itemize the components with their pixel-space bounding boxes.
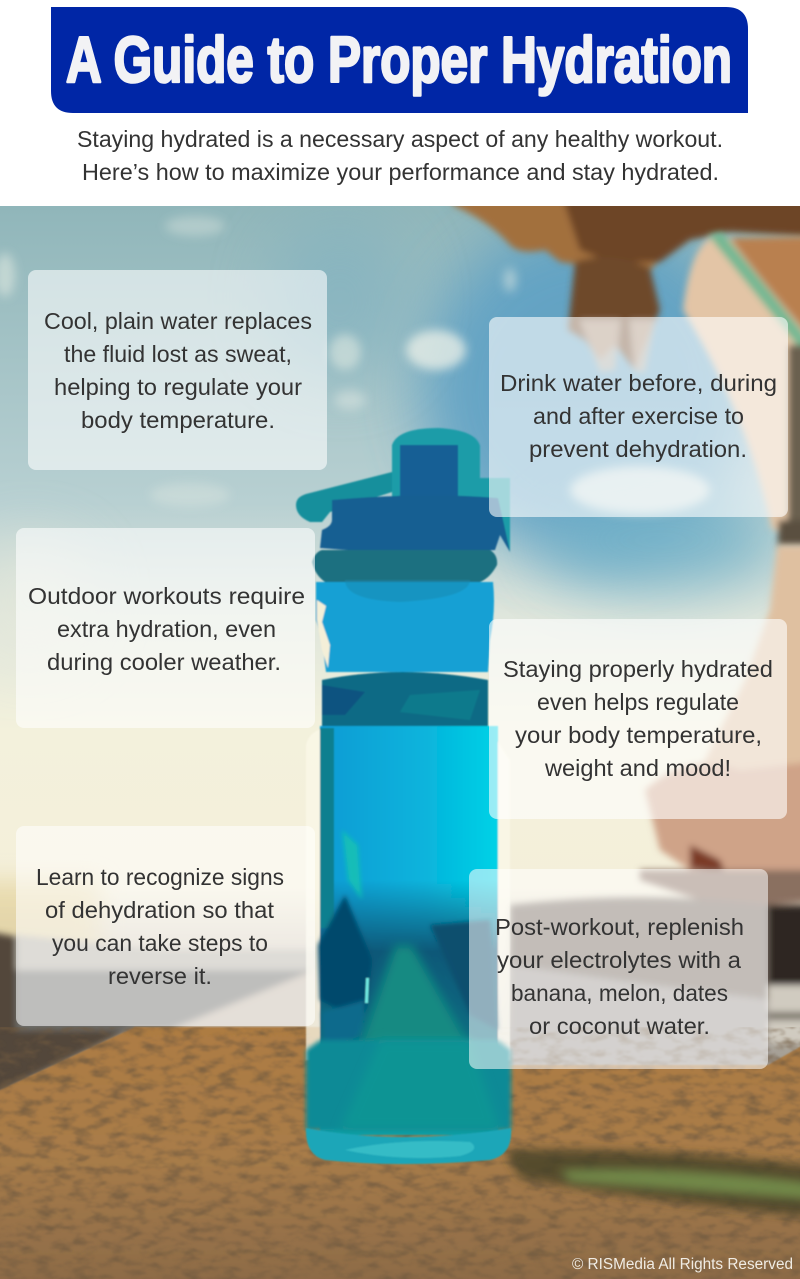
panel: regulate temperature — [489, 619, 787, 819]
title banner — [51, 7, 748, 113]
panel: signs of dehydration: you can take steps to — [52, 930, 268, 956]
ground — [0, 1027, 800, 1279]
panel: signs of dehydration: of dehydration so that — [45, 897, 275, 923]
panel: regulate temperature: even helps regulate — [537, 689, 739, 715]
panel: outdoor workouts — [16, 528, 315, 728]
intro text: Staying hydrated is a necessary aspect of any healthy workout. — [77, 126, 723, 152]
panel: outdoor workouts: Outdoor workouts require — [28, 583, 305, 609]
panel: regulate temperature: weight and mood! — [544, 755, 731, 781]
water bottle — [296, 428, 511, 1164]
panel: electrolytes: banana, melon, dates — [511, 980, 728, 1006]
panel: when to drink: Drink water before, during — [500, 370, 777, 396]
woman: top and arm — [683, 232, 800, 546]
intro text: Here’s how to maximize your performance and stay hydrated. — [82, 159, 719, 185]
panel: when to drink: prevent dehydration. — [529, 436, 747, 462]
panel: regulate temperature: Staying properly hydrated — [503, 656, 773, 682]
panel: regulate temperature: your body temperature, — [515, 722, 762, 748]
panel: signs of dehydration — [16, 826, 315, 1026]
panel: plain water: the fluid lost as sweat, — [64, 341, 292, 367]
panel: electrolytes: or coconut water. — [529, 1013, 710, 1039]
clouds — [0, 216, 710, 514]
intro text — [77, 126, 723, 185]
copyright: © RISMedia All Rights Reserved — [572, 1256, 793, 1273]
bottle lower body — [306, 726, 511, 1164]
bottle flip lid — [296, 428, 510, 552]
panel: electrolytes: Post-workout, replenish — [495, 914, 744, 940]
bottle cap — [320, 495, 510, 552]
panel: outdoor workouts: during cooler weather. — [47, 649, 281, 675]
panel: when to drink — [489, 317, 788, 517]
bottle neck — [312, 550, 497, 582]
woman: lower arm and hands — [510, 545, 800, 1065]
panel: signs of dehydration: Learn to recognize signs — [36, 864, 284, 890]
panel: electrolytes — [469, 869, 768, 1069]
panel: plain water — [28, 270, 327, 470]
panel: signs of dehydration: reverse it. — [108, 963, 212, 989]
bottle dark water band — [322, 672, 488, 730]
panel: electrolytes: your electrolytes with a — [497, 947, 741, 973]
woman: hair and face — [448, 206, 800, 373]
panel: plain water: body temperature. — [81, 407, 275, 433]
horizon — [0, 928, 306, 1090]
panel: plain water: Cool, plain water replaces — [44, 308, 312, 334]
bottle upper body — [316, 582, 494, 672]
panel: outdoor workouts: extra hydration, even — [57, 616, 276, 642]
panel: when to drink: and after exercise to — [533, 403, 744, 429]
panel: plain water: helping to regulate your — [54, 374, 302, 400]
